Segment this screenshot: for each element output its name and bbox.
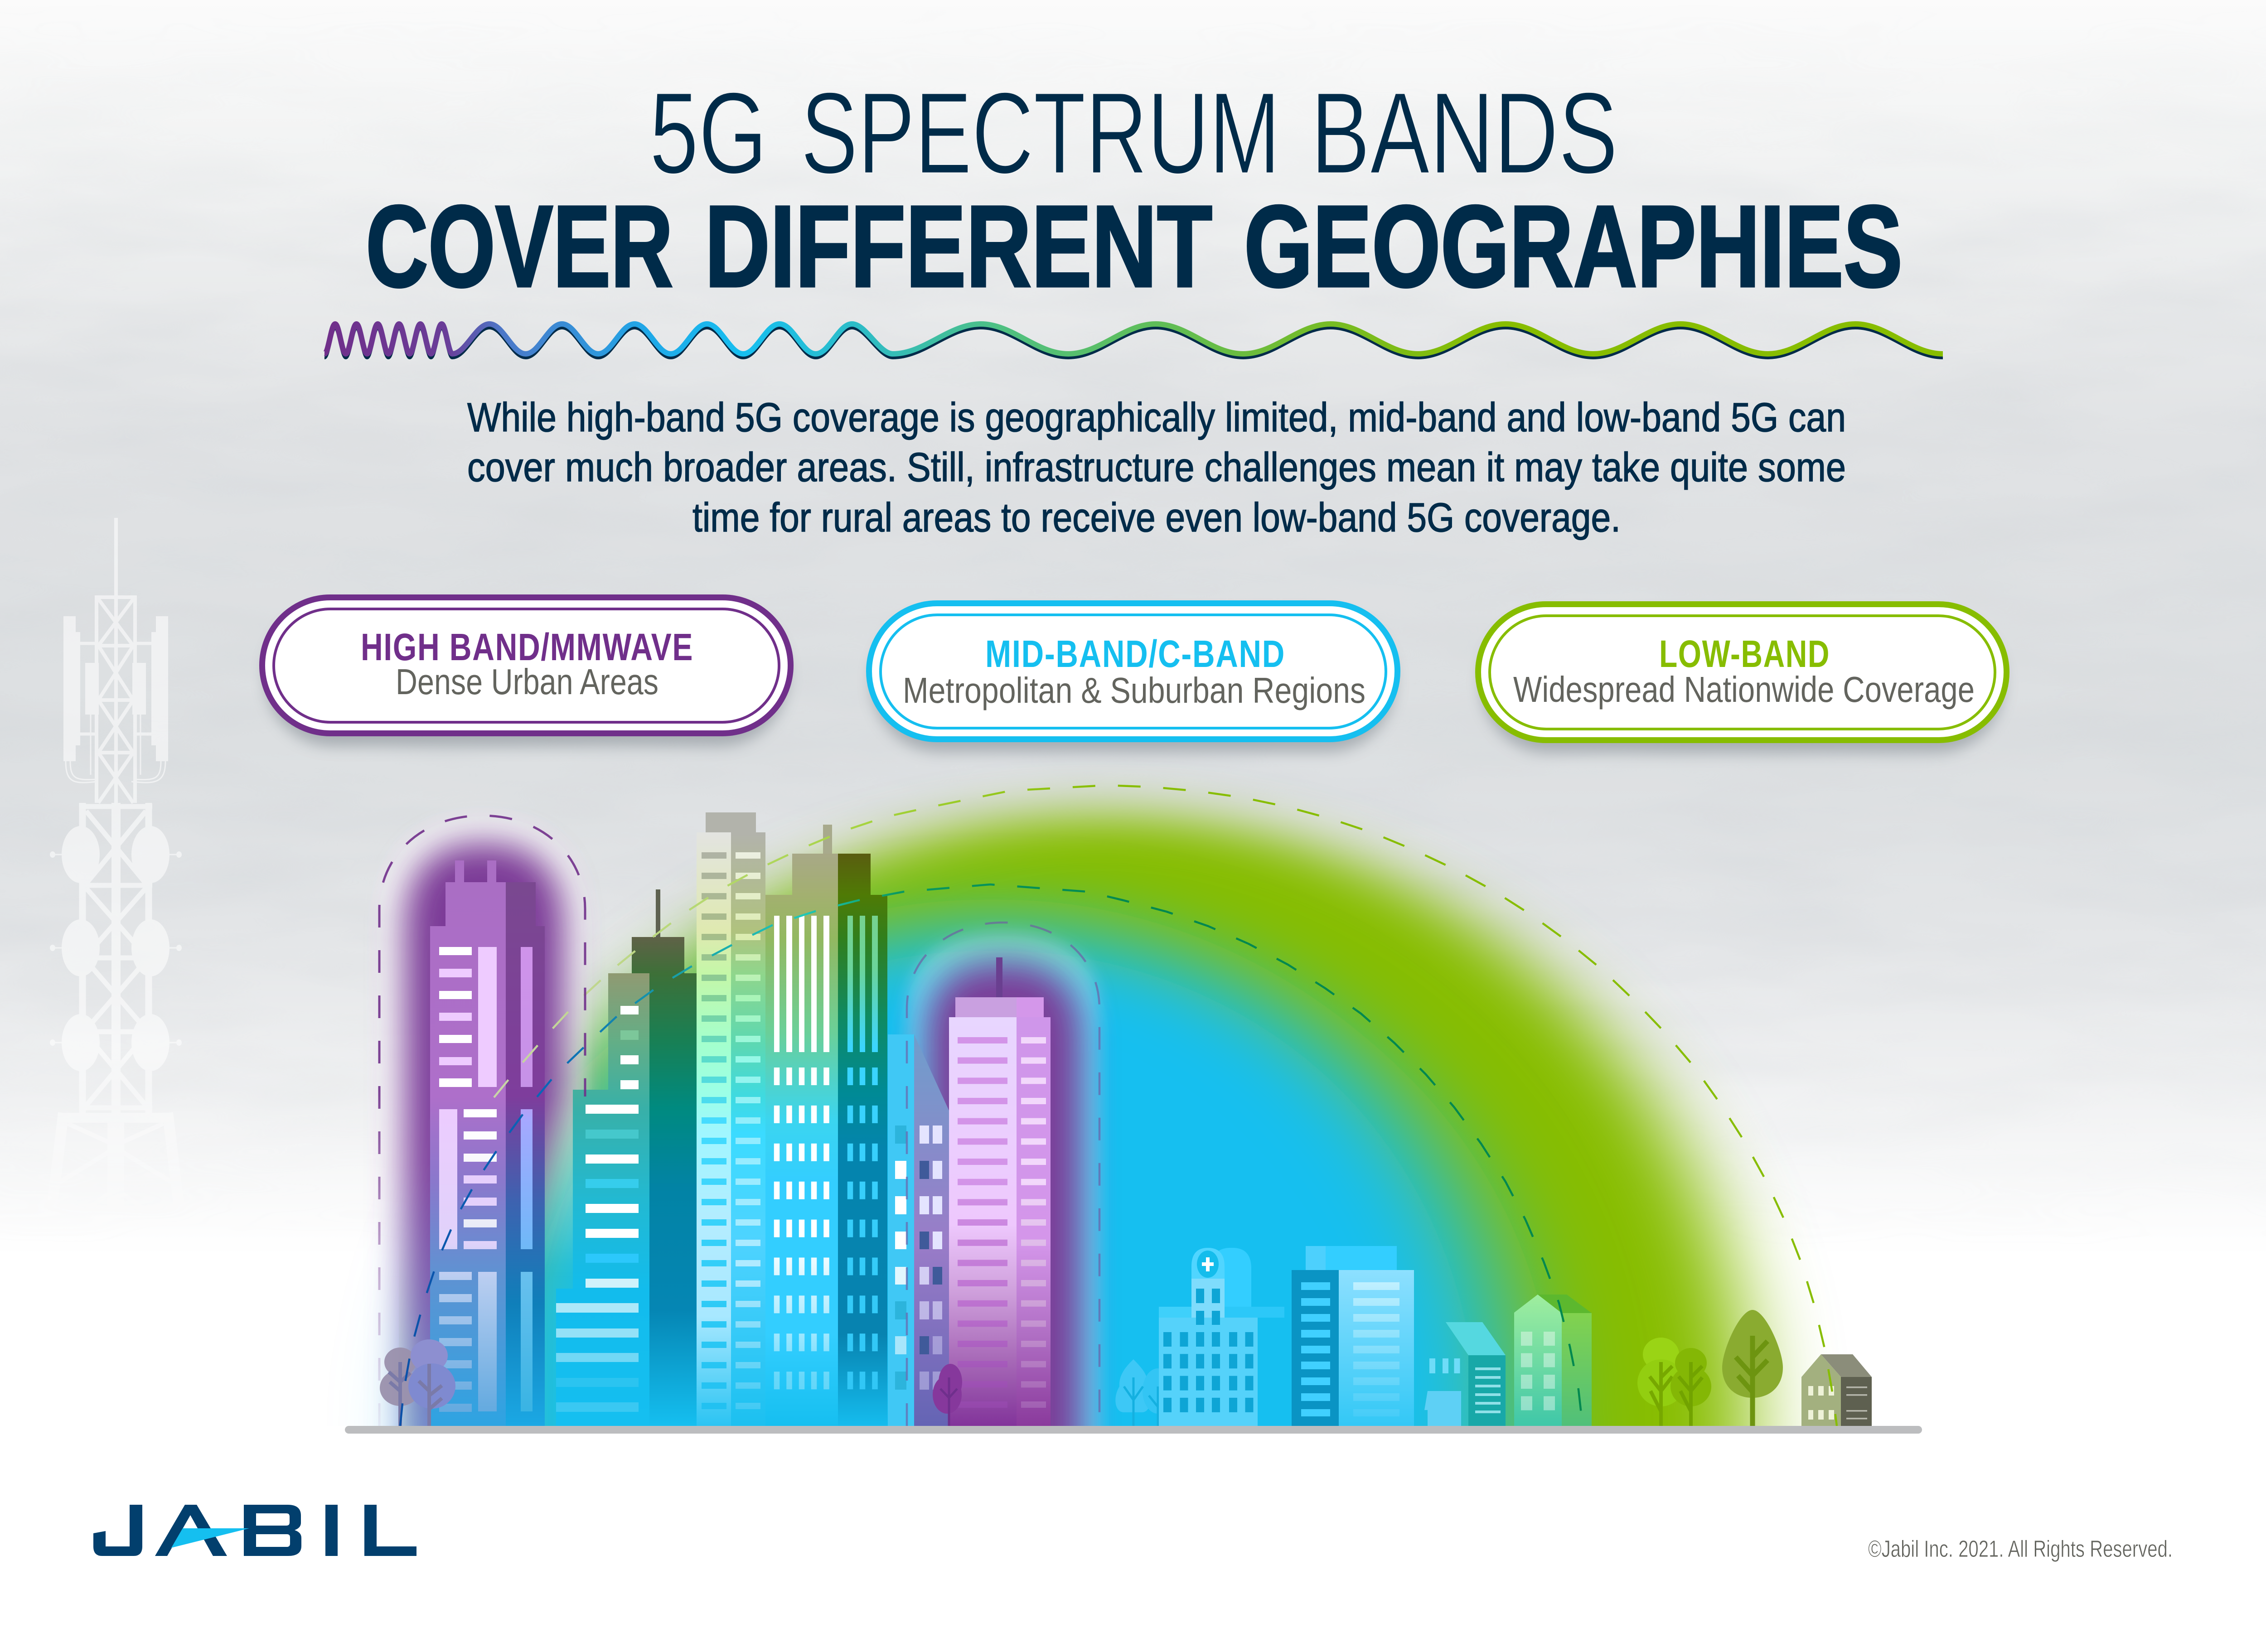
hospital building <box>1159 1248 1284 1426</box>
office building <box>1292 1246 1414 1426</box>
title line 2: GEOGRAPHIES <box>1244 182 1903 311</box>
blue trees <box>1115 1359 1173 1426</box>
panel: low band label: LOW-BAND <box>1659 633 1830 675</box>
tree inside pink column <box>933 1364 962 1426</box>
high-band dashed arch: right <box>907 923 1099 1426</box>
copyright: ©Jabil Inc. 2021. All Rights Reserved. <box>1868 1536 2173 1562</box>
building: vertical-window tower <box>765 825 887 1426</box>
intro paragraph: time for rural areas to receive even low-band 5G coverage. <box>692 495 1621 541</box>
building: narrow tower beside pink tower <box>888 1034 949 1426</box>
panel: high band label: Dense Urban Areas <box>396 662 658 702</box>
panel: high band label <box>262 597 790 746</box>
title line 1: BANDS <box>1311 68 1618 198</box>
title line 2: DIFFERENT <box>705 182 1212 311</box>
building: stepped teal tower <box>556 889 697 1426</box>
high-band halo: right column <box>907 933 1099 1495</box>
small teal-roof building <box>1424 1322 1506 1426</box>
title line 1 <box>649 68 1618 198</box>
building: pink tower <box>949 957 1051 1426</box>
building: purple tower <box>430 860 545 1426</box>
panel: mid band label: Metropolitan & Suburban Regions <box>903 670 1365 710</box>
panel: low band label: Widespread Nationwide Coverage <box>1513 669 1975 710</box>
title line 2 <box>366 182 1903 311</box>
left trees <box>380 1339 455 1426</box>
high-band glow: left column <box>405 843 564 1495</box>
title line 1: SPECTRUM <box>801 68 1280 198</box>
ground line <box>345 1426 1922 1434</box>
high-band glow: right column <box>927 963 1081 1495</box>
icon: cell tower <box>50 518 182 1094</box>
background <box>0 34 2266 1189</box>
mid-band blue dome <box>468 923 1516 1613</box>
intro paragraph: While high-band 5G coverage is geographically limited, mid-band and low-band 5G can <box>467 395 1846 440</box>
title <box>366 68 1903 311</box>
spectrum wave <box>324 324 1943 357</box>
white halo: left column <box>379 816 585 1495</box>
panel: low band label <box>1478 604 2007 753</box>
logo: JABIL <box>93 1505 416 1556</box>
intro paragraph: cover much broader areas. Still, infrastructure challenges mean it may take quite some <box>467 445 1846 490</box>
intro paragraph <box>467 395 1846 541</box>
building: tall slatted tower <box>697 812 765 1426</box>
small house <box>1801 1354 1872 1426</box>
title line 2: COVER <box>366 182 673 311</box>
panel: mid band label: MID-BAND/C-BAND <box>985 633 1285 675</box>
low-band green dome <box>453 814 1749 1613</box>
low-band dashed arc <box>494 785 1837 1426</box>
coverage domes and city scene <box>379 785 1872 1613</box>
mid-band dashed arc <box>400 884 1583 1426</box>
panel: mid band label <box>869 604 1398 752</box>
high-band dashed arch: left <box>379 816 585 1426</box>
title line 1: 5G <box>649 68 767 198</box>
green-roof building <box>1514 1295 1592 1426</box>
panel: high band label: HIGH BAND/MMWAVE <box>361 626 693 668</box>
green trees <box>1637 1310 1783 1426</box>
